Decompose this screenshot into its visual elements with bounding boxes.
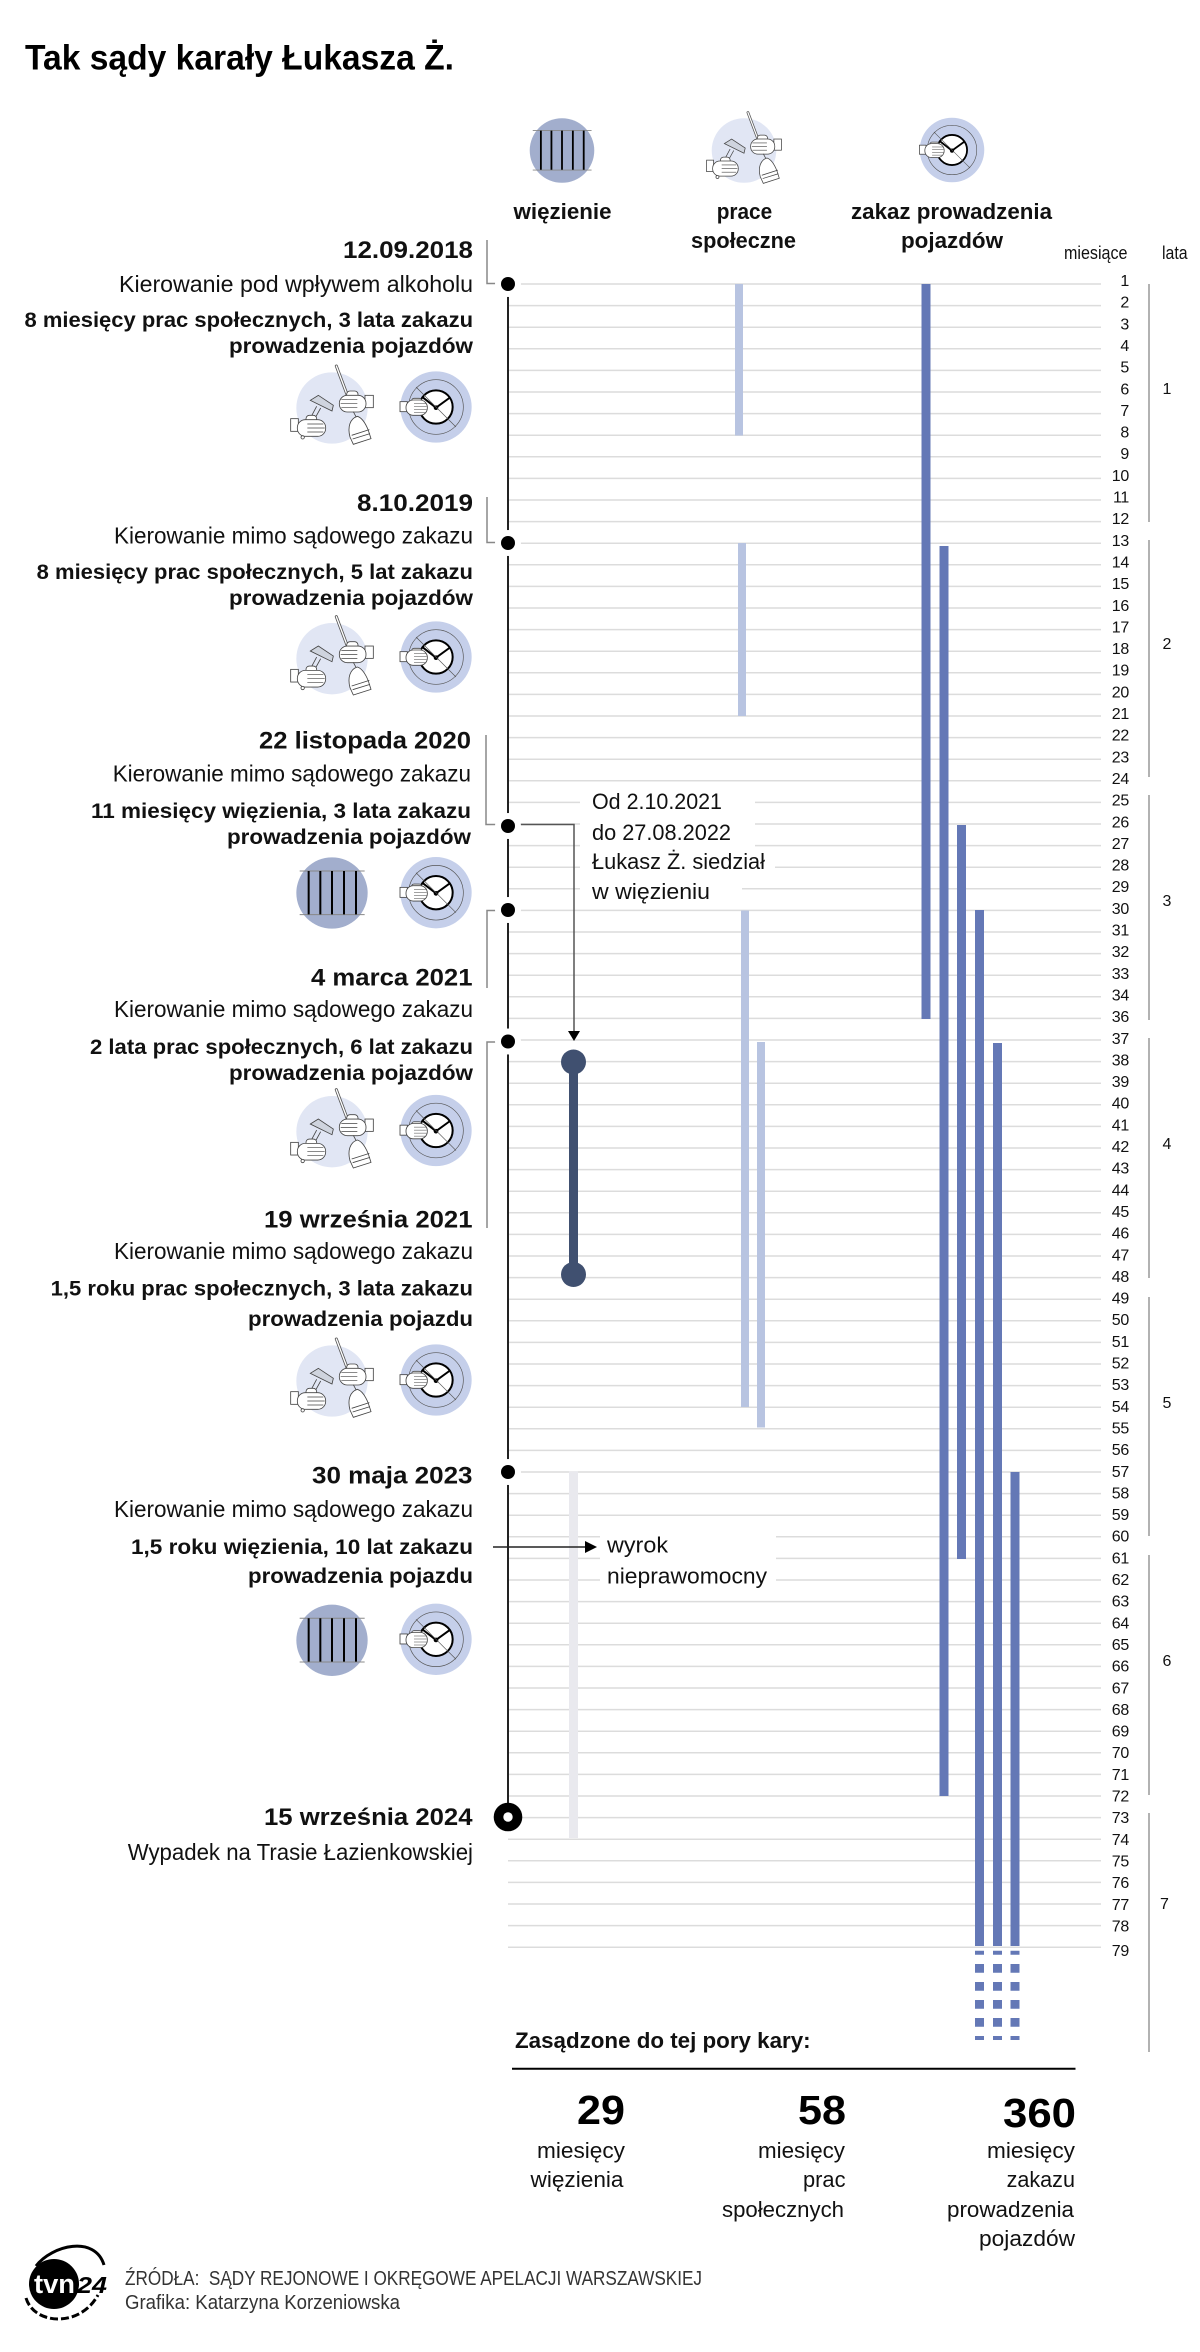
month axis labels: 77: [1112, 1897, 1129, 1914]
icon: driving ban: [400, 1344, 472, 1416]
month axis labels: 8: [1120, 425, 1129, 442]
column header: zakaz prowadzenia pojazdów: [851, 118, 1053, 253]
month axis labels: 21: [1112, 706, 1129, 723]
footer: credit: Grafika: Katarzyna Korzeniowska: [125, 2292, 401, 2314]
year axis brackets and labels: 5: [1162, 1395, 1172, 1412]
arrow: to prison bar: [520, 824, 580, 1041]
month axis labels: 5: [1120, 360, 1129, 377]
month axis labels: 76: [1112, 1875, 1129, 1892]
column header: prace społeczne: prace: [717, 199, 772, 224]
year axis brackets and labels: 2: [1162, 636, 1172, 653]
summary: 360 miesięcy zakazu prowadzenia pojazdów: miesięcy: [987, 2138, 1075, 2163]
event: 22 listopada 2020: [91, 727, 472, 929]
month axis labels: 32: [1112, 944, 1129, 961]
event: 4 marca 2021: prowadzenia pojazdów: [229, 1061, 473, 1085]
month axis labels: 34: [1112, 988, 1129, 1004]
month axis labels: 46: [1112, 1226, 1129, 1243]
logo: tvn24: 24: [76, 2272, 107, 2298]
title: Tak sądy karały Łukasza Ż.: [25, 38, 454, 78]
month axis labels: 1: [1120, 273, 1129, 290]
month axis labels: 40: [1112, 1096, 1129, 1113]
event: 30 maja 2023: 30 maja 2023: [312, 1463, 472, 1490]
callout: prison dates: Od 2.10.2021: [592, 789, 722, 814]
event: 15 września 2024: Wypadek na Trasie Łazienkowskiej: [128, 1839, 473, 1865]
month axis labels: 42: [1112, 1139, 1129, 1156]
icon: community work: [291, 366, 373, 444]
summary: 29 miesięcy więzienia: miesięcy: [537, 2138, 625, 2163]
icon: prison: [296, 1605, 368, 1676]
summary: 360 miesięcy zakazu prowadzenia pojazdów: [947, 2090, 1076, 2251]
month axis labels: 13: [1112, 533, 1129, 550]
arrow: wyrok: [493, 1541, 597, 1553]
icon: driving ban: [400, 1095, 472, 1166]
month axis labels: 62: [1112, 1572, 1129, 1589]
month axis labels: 25: [1112, 793, 1129, 810]
icon: prison: [296, 857, 368, 929]
summary: 58 miesięcy prac społecznych: 58: [798, 2087, 846, 2133]
icon: prison bars: [530, 118, 594, 183]
year axis brackets and labels: 3: [1162, 893, 1172, 910]
month axis labels: 9: [1120, 446, 1129, 463]
icon: community work: [291, 1090, 373, 1168]
event: 8.10.2019: 8.10.2019: [357, 490, 473, 517]
month axis labels: 72: [1112, 1788, 1129, 1806]
month axis labels: 20: [1112, 684, 1129, 701]
month axis labels: 59: [1112, 1507, 1129, 1524]
month axis labels: 14: [1112, 554, 1129, 572]
month axis labels: 66: [1112, 1659, 1129, 1676]
summary: 58 miesięcy prac społecznych: miesięcy: [758, 2138, 845, 2163]
bars: prace społeczne: [735, 284, 765, 1428]
month axis labels: 49: [1112, 1291, 1129, 1308]
event: 30 maja 2023: [114, 1463, 473, 1676]
event: 19 września 2021: Kierowanie mimo sądowego zakazu: [114, 1238, 473, 1264]
year axis brackets and labels: 1: [1162, 381, 1172, 398]
month axis labels: 2: [1120, 295, 1129, 312]
month axis labels: 41: [1112, 1117, 1129, 1134]
month axis labels: 15: [1112, 576, 1129, 593]
event: 12.09.2018: prowadzenia pojazdów: [229, 334, 473, 358]
footer: sources: ŹRÓDŁA: SĄDY REJONOWE I OKRĘGOWE APELACJI WARSZAWSKIEJ: [125, 2267, 702, 2290]
month axis labels: 36: [1112, 1009, 1129, 1026]
event: 12.09.2018: 8 miesięcy prac społecznych, 3 lata zakazu: [24, 308, 473, 332]
month axis labels: 18: [1112, 641, 1129, 658]
month axis labels: 61: [1112, 1550, 1129, 1567]
month axis labels: 23: [1112, 749, 1129, 766]
month axis labels: 39: [1112, 1074, 1129, 1091]
month axis labels: 64: [1112, 1615, 1129, 1632]
month axis labels: 55: [1112, 1420, 1129, 1438]
summary heading: Zasądzone do tej pory kary:: [515, 2028, 811, 2053]
month axis labels: 7: [1120, 403, 1129, 420]
column header: więzienie: [512, 118, 612, 224]
month axis labels: 11: [1113, 490, 1129, 506]
month axis labels: 19: [1112, 663, 1129, 680]
timeline: [486, 240, 522, 1831]
month axis labels: 54: [1112, 1399, 1129, 1416]
bar: prison pending: [569, 1472, 578, 1838]
summary: 58 miesięcy prac społecznych: społecznych: [722, 2197, 844, 2222]
month axis labels: 22: [1112, 728, 1129, 745]
summary: 360 miesięcy zakazu prowadzenia pojazdów: zakazu: [1007, 2167, 1075, 2192]
column header: prace społeczne: społeczne: [691, 228, 796, 253]
event: 30 maja 2023: Kierowanie mimo sądowego zakazu: [114, 1496, 473, 1522]
year axis brackets and labels: 7: [1160, 1896, 1169, 1913]
event: 19 września 2021: 1,5 roku prac społecznych, 3 lata zakazu: [51, 1277, 473, 1301]
event: 19 września 2021: 19 września 2021: [264, 1207, 472, 1234]
month axis labels: 73: [1112, 1810, 1129, 1827]
month axis labels: 69: [1112, 1724, 1129, 1741]
month axis labels: 63: [1112, 1594, 1129, 1611]
event: 22 listopada 2020: prowadzenia pojazdów: [227, 825, 471, 849]
column header: zakaz prowadzenia pojazdów: zakaz prowadzenia: [851, 199, 1053, 224]
icon: driving ban: [400, 857, 472, 928]
dashed continuation of bans: [980, 1951, 1015, 2040]
event: 8.10.2019: Kierowanie mimo sądowego zakazu: [114, 522, 473, 548]
month axis labels: 67: [1112, 1680, 1129, 1697]
icon: driving ban: [400, 1604, 472, 1675]
event: 22 listopada 2020: Kierowanie mimo sądowego zakazu: [113, 761, 471, 787]
callout: prison dates: Łukasz Ż. siedział: [592, 849, 765, 874]
event: 22 listopada 2020: 11 miesięcy więzienia, 3 lata zakazu: [91, 799, 471, 823]
column header: więzienie: więzienie: [512, 199, 612, 224]
summary: 360 miesięcy zakazu prowadzenia pojazdów: prowadzenia: [947, 2197, 1075, 2222]
month axis labels: 12: [1112, 511, 1129, 528]
month axis labels: 57: [1112, 1464, 1129, 1481]
month axis labels: 38: [1112, 1052, 1129, 1069]
event: 8.10.2019: prowadzenia pojazdów: [229, 586, 473, 610]
event: 12.09.2018: 12.09.2018: [343, 237, 473, 264]
month axis labels: 78: [1112, 1918, 1129, 1935]
month axis labels: 79: [1112, 1943, 1129, 1960]
month axis labels: 71: [1112, 1767, 1129, 1784]
icon: community work: [291, 1339, 373, 1417]
event: 15 września 2024: 15 września 2024: [264, 1804, 473, 1831]
summary: 58 miesięcy prac społecznych: [722, 2087, 846, 2222]
month axis labels: 26: [1112, 814, 1129, 831]
callout: prison dates: w więzieniu: [591, 879, 710, 904]
month axis labels: 45: [1112, 1204, 1129, 1221]
icon: steering wheel ban: [919, 118, 984, 182]
summary: 29 miesięcy więzienia: [529, 2087, 625, 2192]
bars: zakaz prowadzenia pojazdów: [922, 284, 1020, 1946]
event: 4 marca 2021: 2 lata prac społecznych, 6 lat zakazu: [90, 1035, 473, 1059]
summary: 360 miesięcy zakazu prowadzenia pojazdów: pojazdów: [979, 2226, 1075, 2251]
month axis labels: [1112, 273, 1129, 1960]
callout: prison dates: do 27.08.2022: [592, 820, 731, 845]
month axis labels: 16: [1112, 598, 1129, 615]
event: 4 marca 2021: 4 marca 2021: [311, 965, 472, 992]
event: 4 marca 2021: Kierowanie mimo sądowego zakazu: [114, 996, 473, 1022]
month axis labels: 65: [1112, 1637, 1129, 1654]
event: 30 maja 2023: 1,5 roku więzienia, 10 lat zakazu: [131, 1535, 473, 1559]
month axis labels: 52: [1112, 1356, 1129, 1372]
callout: wyrok nieprawomocny: [600, 1532, 776, 1593]
month axis labels: 30: [1112, 901, 1129, 918]
logo: tvn24: tvn: [34, 2269, 75, 2299]
month axis labels: 51: [1112, 1334, 1129, 1351]
month axis labels: 6: [1120, 381, 1129, 398]
month axis labels: 27: [1112, 836, 1129, 853]
callout: wyrok nieprawomocny: nieprawomocny: [607, 1564, 767, 1588]
month axis labels: 28: [1112, 858, 1129, 875]
summary: 29 miesięcy więzienia: 29: [577, 2087, 625, 2133]
month axis labels: 43: [1112, 1161, 1129, 1178]
summary: 360 miesięcy zakazu prowadzenia pojazdów: 360: [1003, 2090, 1076, 2136]
month axis labels: 48: [1112, 1269, 1129, 1286]
month axis labels: 60: [1112, 1529, 1129, 1546]
month axis labels: 56: [1112, 1442, 1129, 1459]
month axis labels: 3: [1120, 316, 1129, 333]
month axis labels: 47: [1112, 1247, 1129, 1264]
month axis labels: 74: [1112, 1832, 1129, 1849]
event: 15 września 2024: [128, 1804, 473, 1865]
year axis brackets and labels: 4: [1162, 1136, 1172, 1153]
month axis labels: 50: [1112, 1312, 1129, 1329]
month axis labels: 10: [1112, 468, 1129, 485]
month axis labels: 24: [1112, 771, 1129, 788]
callout: prison dates: [580, 789, 775, 904]
icon: driving ban: [400, 371, 472, 443]
summary: 29 miesięcy więzienia: więzienia: [529, 2167, 624, 2192]
event: 19 września 2021: prowadzenia pojazdu: [248, 1307, 473, 1331]
year axis brackets and labels: [1149, 284, 1172, 2052]
month axis labels: 37: [1112, 1031, 1129, 1048]
month axis labels: 31: [1112, 922, 1129, 940]
axis heading: lata: lata: [1162, 243, 1188, 263]
summary: 58 miesięcy prac społecznych: prac: [803, 2167, 846, 2192]
callout: wyrok nieprawomocny: wyrok: [606, 1532, 669, 1558]
year axis brackets and labels: 6: [1162, 1653, 1172, 1670]
event: 4 marca 2021: [90, 965, 473, 1168]
event: 12.09.2018: [24, 237, 473, 444]
icon: community work: [291, 617, 373, 695]
axis heading: miesiące: miesiące: [1064, 243, 1128, 263]
month axis labels: 44: [1112, 1182, 1129, 1199]
bar: prison served: [561, 1050, 586, 1287]
month axis labels: 17: [1112, 619, 1129, 636]
month axis labels: 75: [1112, 1854, 1129, 1870]
icon: community work tools: [707, 112, 781, 183]
month axis labels: 29: [1112, 879, 1129, 896]
month axis labels: 33: [1112, 966, 1129, 983]
event: 8.10.2019: 8 miesięcy prac społecznych, 5 lat zakazu: [37, 560, 473, 584]
event: 22 listopada 2020: 22 listopada 2020: [259, 727, 471, 754]
event: 19 września 2021: [51, 1207, 473, 1417]
logo: tvn24: [26, 2246, 107, 2319]
month axis labels: 68: [1112, 1702, 1129, 1719]
event: 30 maja 2023: prowadzenia pojazdu: [248, 1564, 473, 1588]
icon: driving ban: [400, 621, 472, 693]
event: 8.10.2019: [37, 490, 473, 695]
month axis labels: 70: [1112, 1745, 1129, 1762]
month axis labels: 53: [1112, 1377, 1129, 1394]
column header: zakaz prowadzenia pojazdów: pojazdów: [901, 228, 1004, 253]
event: 12.09.2018: Kierowanie pod wpływem alkoholu: [119, 271, 473, 297]
month axis labels: 58: [1112, 1485, 1129, 1502]
month axis labels: 4: [1120, 338, 1129, 355]
column header: prace społeczne: [691, 112, 796, 253]
